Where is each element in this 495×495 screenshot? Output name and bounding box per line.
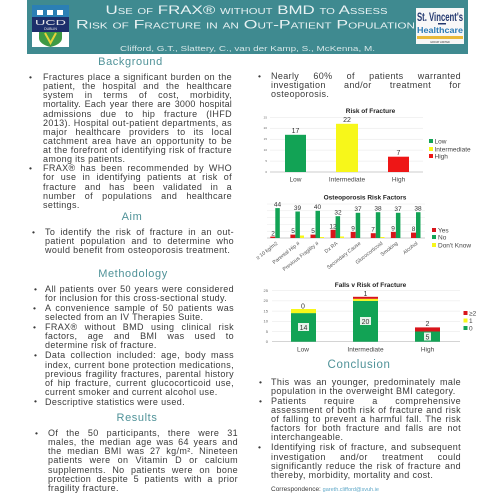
text block: background: number of populations and healthcare	[43, 191, 232, 201]
chart: Risk of Fracture: 25	[264, 115, 267, 119]
chart: Risk of Fracture: 17	[292, 128, 299, 135]
icon: St Vincent's Healthcare logo: St. Vincent's	[417, 10, 463, 24]
text block: conclusion: assessment of both risk of fracture and risk	[271, 405, 461, 415]
chart: Osteoporosis Risk Factors: 2	[271, 230, 275, 238]
heading: Methodology: Methodology	[98, 268, 168, 280]
text block: results: the median BMI was 27 kg/m². Nineteen	[48, 446, 238, 456]
chart: Falls v Risk of Fracture: 20	[362, 319, 369, 326]
text block: background: catchment area have an opportunity to be	[43, 136, 232, 146]
chart: Risk of Fracture: 22	[343, 117, 351, 124]
chart: Falls v Risk of Fracture: 20	[264, 298, 269, 303]
chart: Risk of Fracture: 20	[264, 126, 267, 130]
text block: background	[29, 72, 232, 210]
chart: Osteoporosis Risk Factors: 8	[412, 226, 416, 233]
heading: Background: Background	[98, 56, 163, 68]
text block: conclusion	[258, 376, 461, 480]
chart: Risk of Fracture: 5	[265, 159, 267, 163]
icon: St Vincent's Healthcare logo: GROUP LIMITED	[430, 41, 450, 44]
text block: conclusion: investigation and/or treatment could	[271, 452, 461, 462]
text block: conclusion: Identifying risk of fracture, and subsequent	[271, 442, 461, 452]
chart: Osteoporosis Risk Factors: 39	[294, 205, 301, 212]
icon: UCD Dublin logo: UCD	[35, 18, 67, 27]
text block: methodology: •	[34, 350, 37, 360]
text block: conclusion: thereby, morbidity, mortality and cost.	[271, 470, 433, 480]
text block: background: fracture and has been validated in a	[43, 182, 232, 192]
chart: Osteoporosis Risk Factors: Yes	[438, 228, 449, 234]
title: Risk of Fracture in an Out-Patient Population	[76, 18, 415, 32]
text block: conclusion: •	[259, 376, 262, 386]
text block: key finding	[258, 71, 461, 99]
chart: Risk of Fracture: 15	[264, 137, 267, 141]
chart: Osteoporosis Risk Factors: 7	[371, 226, 375, 234]
heading: Conclusion: Conclusion	[328, 359, 390, 371]
chart: Osteoporosis Risk Factors: Alcohol	[402, 241, 419, 256]
text block: background: FRAX® has been recommended by WHO	[43, 163, 232, 173]
text block: results: males, the median age was 64 years and	[48, 437, 238, 447]
text block: background: patient, the hospital and the healthcare	[43, 81, 232, 91]
text block: background: mortality. Each year there are 3000 hospital	[43, 99, 232, 109]
chart: Osteoporosis Risk Factors: 5	[291, 228, 295, 235]
chart: Risk of Fracture: Low	[290, 176, 302, 184]
title: Use of FRAX® without BMD to Assess	[106, 3, 388, 17]
chart: Osteoporosis Risk Factors: Parental Hip #	[272, 241, 301, 266]
text block: background: •	[29, 72, 32, 82]
chart: Osteoporosis Risk Factors: 44	[274, 202, 281, 208]
chart: Falls v Risk of Fracture: Low	[297, 346, 309, 354]
text block: methodology: current smoker and current alcohol use.	[45, 387, 218, 397]
chart: Osteoporosis Risk Factors: 9	[351, 226, 355, 232]
text block: conclusion: factors for both fracture and falls are not	[271, 423, 461, 433]
title	[76, 3, 415, 32]
text block: methodology: •	[33, 302, 36, 312]
text block: methodology: Descriptive statistics were used.	[45, 397, 185, 407]
text block: aim: •	[32, 227, 35, 237]
chart: Risk of Fracture: High	[392, 176, 406, 184]
text block: methodology: Data collection included: age, body mass	[45, 350, 234, 360]
text block: background: •	[29, 163, 32, 173]
chart: Risk of Fracture: Risk of Fracture	[346, 108, 396, 115]
chart: Risk of Fracture: High	[434, 154, 448, 160]
chart: Risk of Fracture: 0	[265, 170, 267, 174]
text block: results	[35, 428, 238, 493]
chart: Falls v Risk of Fracture: 25	[264, 288, 269, 293]
chart: Osteoporosis Risk Factors: 5	[311, 228, 315, 235]
text block: methodology: previous fragility fractures, parental history	[45, 369, 234, 379]
chart: Falls v Risk of Fracture: 2	[426, 321, 430, 328]
chart: Falls v Risk of Fracture: 1	[364, 291, 368, 298]
chart: Osteoporosis Risk Factors: 12	[329, 224, 337, 230]
chart: Osteoporosis Risk Factors: Glucocorticoid	[355, 241, 384, 266]
text block: methodology: selected from an IV Therapies Suite.	[45, 312, 203, 322]
text block: results: patients were on Vitamin D or calcium	[48, 455, 238, 465]
chart: Risk of Fracture: 7	[397, 150, 401, 157]
text block: key finding: Nearly 60% of patients warranted	[271, 71, 461, 81]
text block: conclusion: significantly reduce the risk of fracture and	[271, 461, 461, 471]
chart: Osteoporosis Risk Factors: 40	[314, 204, 321, 211]
text block: methodology: determine risk of fracture.	[45, 340, 157, 350]
chart: Osteoporosis Risk Factors: ≥ 10 kg/m2	[255, 241, 279, 261]
chart: Risk of Fracture	[264, 108, 471, 184]
text block: background: Fractures place a significant burden on the	[43, 72, 232, 82]
chart: Falls v Risk of Fracture: 0	[469, 326, 473, 332]
icon: UCD Dublin logo: DUBLIN	[44, 27, 57, 31]
text block: conclusion: •	[258, 442, 261, 452]
chart: Osteoporosis Risk Factors: 37	[354, 206, 362, 213]
correspondence line: Correspondence: gareth.clifford@svuh.ie	[271, 486, 379, 493]
chart: Osteoporosis Risk Factors: 37	[394, 206, 402, 213]
text block: methodology: index, current bone protection medications,	[45, 360, 234, 370]
text block: background: settings.	[43, 200, 80, 210]
chart: Osteoporosis Risk Factors: 38	[414, 206, 422, 212]
text block: conclusion: This was an younger, predominately male	[271, 376, 461, 386]
chart: Falls v Risk of Fracture: 15	[264, 308, 269, 313]
text block: methodology: A convenience sample of 50 patients was	[45, 303, 234, 313]
text block: conclusion: of falling to prevent a harmful fall. The risk	[271, 414, 461, 424]
text block: results: protection despite 5 patients with a prior	[48, 474, 238, 484]
text block: conclusion: Patients require a comprehensive	[271, 396, 461, 406]
icon: St Vincent's Healthcare logo	[416, 8, 464, 44]
text block: methodology: of hip fracture, current glucocorticoid use,	[45, 378, 234, 388]
chart: Osteoporosis Risk Factors: Secondary Cause	[326, 241, 362, 271]
chart: Osteoporosis Risk Factors: 9	[391, 226, 395, 232]
chart: Risk of Fracture: Intermediate	[434, 146, 471, 154]
heading: Aim: Aim	[122, 211, 142, 223]
text block: key finding: osteoporosis.	[271, 89, 329, 99]
chart: Falls v Risk of Fracture: 0	[266, 339, 269, 344]
text block: aim	[32, 227, 234, 255]
chart: Osteoporosis Risk Factors: Dx RA	[324, 241, 340, 255]
text block: conclusion: •	[259, 396, 262, 406]
text block: background: major healthcare providers to its local	[43, 127, 232, 137]
text block: aim: To identify the risk of fracture in an out-	[45, 227, 234, 237]
icon: UCD Dublin logo	[32, 5, 69, 47]
chart: Osteoporosis Risk Factors: Don't Know	[438, 242, 471, 250]
chart: Falls v Risk of Fracture: 0	[301, 304, 305, 310]
chart: Falls v Risk of Fracture: 5	[266, 329, 269, 334]
header banner	[27, 0, 468, 54]
text block: results: supplements. No patients were on bone	[48, 464, 238, 474]
chart: Osteoporosis Risk Factors	[255, 194, 472, 272]
text block: methodology: •	[34, 284, 37, 294]
chart: Osteoporosis Risk Factors: Osteoporosis Risk Factors	[324, 194, 407, 202]
text block: results: fragility fracture.	[48, 483, 119, 493]
text block: methodology: factors, age and BMI was used to	[45, 331, 234, 341]
chart: Risk of Fracture: Low	[434, 138, 447, 146]
chart: Falls v Risk of Fracture: High	[421, 346, 435, 354]
text block: key finding: •	[258, 71, 261, 81]
text block: methodology	[33, 284, 234, 407]
chart: Falls v Risk of Fracture: 10	[264, 319, 269, 324]
chart: Osteoporosis Risk Factors: No	[438, 234, 447, 242]
text block: results: •	[35, 428, 38, 438]
heading: Results: Results	[117, 412, 157, 424]
text block: results: Of the 50 participants, there were 31	[48, 428, 238, 438]
chart: Falls v Risk of Fracture: Falls v Risk of Fracture	[335, 282, 407, 289]
chart: Falls v Risk of Fracture: Intermediate	[347, 346, 384, 354]
chart: Falls v Risk of Fracture	[264, 282, 477, 354]
text block: background: among its patients.	[43, 154, 125, 164]
text block: key finding: investigation and/or treatment for	[271, 80, 461, 90]
text block: conclusion: population in the overweight BMI category.	[271, 386, 456, 396]
chart: Osteoporosis Risk Factors: Previous Fragility #	[282, 241, 320, 272]
text block: background: for use in identifying patients at risk of	[43, 172, 232, 182]
authors: Clifford, G.T., Slattery, C., van der Kamp, S., McKenna, M.	[120, 44, 375, 53]
chart: Risk of Fracture: Intermediate	[329, 176, 365, 184]
chart: Falls v Risk of Fracture: 14	[300, 325, 307, 332]
chart: Osteoporosis Risk Factors: 38	[374, 206, 382, 212]
text block: methodology: •	[33, 322, 36, 332]
text block: background: at the forefront of identifying risk of fracture	[43, 145, 232, 155]
chart: Osteoporosis Risk Factors: Smoking	[380, 241, 399, 258]
text block: methodology: FRAX® without BMD using clinical risk	[45, 322, 234, 332]
chart: Risk of Fracture: 10	[264, 148, 267, 152]
chart: Falls v Risk of Fracture: 1	[469, 318, 473, 325]
text block: aim: patient population and to determine who	[45, 236, 234, 246]
text block: methodology: for inclusion for this cross-sectional study.	[45, 293, 227, 303]
text block: aim: would benefit from osteoporosis treatment.	[45, 245, 230, 255]
chart: Osteoporosis Risk Factors: 32	[334, 210, 342, 216]
text block: methodology: All patients over 50 years were considered	[45, 284, 234, 294]
icon: St Vincent's Healthcare logo: Healthcare	[417, 26, 464, 35]
text block: background: system in terms of cost, morbidity,	[43, 90, 232, 100]
text block: background: 2013). Hospital out-patient departments, as	[43, 118, 232, 128]
text block: conclusion: interchangeable.	[271, 432, 343, 442]
text block: methodology: •	[34, 396, 37, 406]
chart: Falls v Risk of Fracture: 5	[426, 334, 430, 342]
text block: background: admissions due to hip fracture (IHFD	[43, 108, 232, 118]
chart: Falls v Risk of Fracture: ≥2	[469, 310, 477, 318]
